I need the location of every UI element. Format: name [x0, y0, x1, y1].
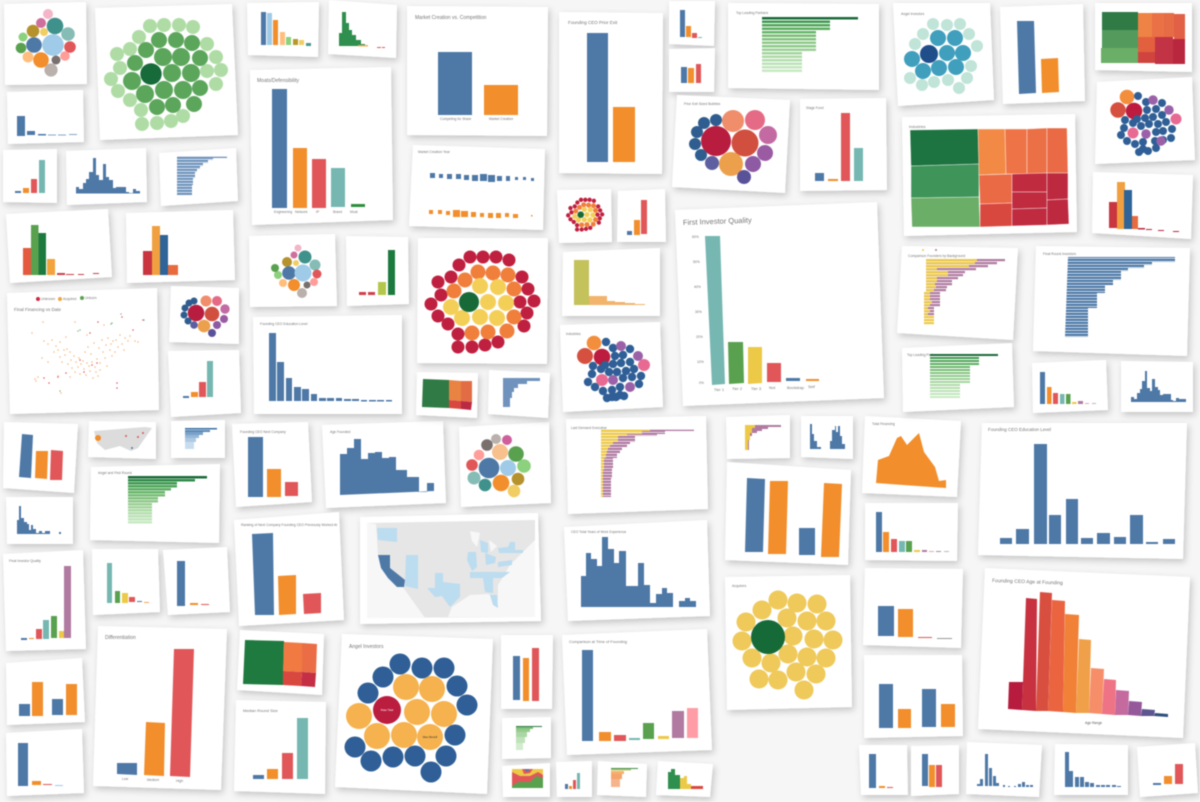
bubbles	[344, 654, 478, 782]
panel: next company ranking bars	[234, 512, 344, 626]
legend: Acquired	[63, 297, 76, 301]
legend	[36, 296, 97, 301]
title: CEO Total Years of Work Experience	[571, 530, 626, 534]
panel: First Investor Quality: Self	[808, 384, 816, 389]
axis labels: 60%	[692, 235, 699, 239]
panel: repeated color bubbles	[249, 234, 337, 307]
panel: Market Creation vs Competition	[407, 6, 548, 136]
panel: red orange blue bars	[126, 210, 235, 283]
panel: bottom mini gradient histogram	[656, 761, 713, 797]
bubbles	[689, 110, 777, 184]
panel: Moats and Defensibility: Brand	[333, 210, 342, 214]
title: Total Financing	[872, 422, 895, 426]
title: Acquirers	[732, 584, 747, 588]
title: Prior Exit Sized Bubbles	[684, 102, 721, 106]
panel: dominant blue bar	[163, 547, 230, 615]
bar chart	[253, 718, 308, 779]
title: Final Financing vs Date	[14, 307, 62, 312]
panel: multi color bars	[865, 503, 958, 561]
panel: Top Leading Partners	[728, 3, 879, 90]
horizontal bars	[762, 17, 858, 72]
panel: rising four bars	[3, 149, 57, 203]
panel: bottom mini bars	[556, 761, 592, 797]
axis labels: 40%	[694, 285, 701, 289]
title: Final Investor Quality	[9, 559, 41, 563]
panel: stacked horizontal yellow purple	[566, 416, 708, 514]
horizontal bars	[930, 354, 998, 398]
highlighted states	[377, 528, 523, 608]
panel: First Investor Quality: Bootstrap	[787, 385, 805, 390]
panel: three bars left	[3, 422, 78, 493]
panel: small three bars	[669, 48, 715, 92]
panel: Top Leading Partners second	[902, 343, 1014, 412]
panel: Founding CEO Age at Founding	[978, 568, 1190, 738]
panel: mini layered bubbles	[557, 189, 612, 243]
panel: green mini horizontal	[502, 717, 551, 759]
panel: median round size small	[168, 350, 241, 417]
panel: age histogram	[322, 421, 446, 508]
axis labels: 20%	[696, 335, 703, 339]
title: Founding CEO Next Company	[240, 430, 286, 434]
panel: blue staircase horizontal	[488, 370, 550, 418]
panel: three bars narrow	[501, 635, 553, 709]
panel: Founding CEO Age at Founding: Age Range	[1085, 721, 1102, 725]
bar chart	[1000, 444, 1175, 544]
title: Top Leading Partners	[736, 11, 769, 15]
stacked bars	[924, 259, 1005, 324]
title: First Investor Quality	[683, 216, 752, 227]
bar chart	[438, 52, 518, 115]
histogram	[340, 439, 434, 495]
panel: orange area chart	[862, 416, 961, 497]
panel: blue histogram right	[1121, 361, 1193, 412]
title: Market Creation vs. Competition	[415, 15, 487, 21]
panel: sorted color bars	[247, 2, 319, 57]
panel: small bars one dominant	[7, 90, 84, 144]
panel: bottom bars 4	[1054, 744, 1128, 795]
panel: three rising bars	[617, 189, 666, 242]
title: Last Demand Executive	[571, 426, 607, 430]
bar chart	[252, 533, 321, 615]
blue squares	[430, 173, 534, 182]
axis labels: 30%	[695, 310, 702, 314]
panel: US state map	[360, 513, 541, 624]
panel: Median Round Size	[234, 700, 326, 794]
panel: next company bars	[232, 422, 312, 507]
panel: grouped color bars top right	[1092, 172, 1193, 239]
title: Angel Investors	[349, 644, 384, 650]
panel: First Investor Quality: Tier 1	[714, 387, 725, 392]
title: Founding CEO Prior Exit	[568, 20, 618, 25]
area chart	[876, 433, 946, 488]
panel: Final Investor Quality small	[3, 550, 86, 651]
bar chart	[21, 566, 71, 640]
panel: Market Creation small	[1000, 4, 1085, 104]
horizontal bars	[1065, 257, 1175, 337]
bubbles	[732, 590, 842, 700]
histogram	[1008, 592, 1168, 717]
California	[378, 555, 405, 587]
panel: thirteen color bubbles	[459, 422, 551, 507]
title: Top Leading Partners	[907, 353, 940, 357]
title: Market Creation Year	[418, 150, 451, 154]
panel: First Investor Quality: Tier 2	[732, 386, 743, 391]
panel: olive long-tail histogram	[562, 248, 660, 316]
title: Age Founded	[330, 430, 350, 434]
panel: Founding CEO Education Level	[978, 423, 1187, 559]
panel: blue histogram	[66, 148, 147, 205]
panel: age histogram blue	[564, 520, 710, 621]
panel: Angel Investors teal bubbles	[893, 3, 994, 106]
left chart	[745, 478, 788, 554]
panel: Moats and Defensibility: Engineering	[274, 210, 292, 214]
horizontal bars	[128, 476, 207, 524]
bubbles: Peter Thiel	[381, 708, 394, 712]
panel: green histogram	[328, 0, 397, 58]
map base	[367, 520, 535, 618]
panel: Final Round Investors	[1033, 246, 1190, 356]
panel: Moats and Defensibility: Moat	[350, 210, 358, 214]
panel: treemap top right	[1095, 3, 1192, 72]
bar chart	[582, 650, 698, 741]
histogram	[581, 537, 696, 607]
panel: Prior Exit bubbles	[672, 95, 790, 193]
title: Industries	[566, 332, 581, 336]
panel: small four bars	[669, 1, 715, 46]
title: Differentiation	[105, 635, 136, 641]
axis labels	[692, 235, 704, 385]
panel: colored stacked area mini	[502, 763, 550, 797]
panel: paired mini histograms	[801, 416, 853, 459]
panel: square marks timeline	[409, 145, 545, 230]
bar chart	[815, 113, 863, 181]
panel: two bars with small tail	[863, 568, 963, 648]
panel: bottom histogram 3	[966, 742, 1042, 797]
bubbles	[904, 18, 983, 94]
panel: Moats and Defensibility: Network	[295, 210, 308, 214]
panel: Industries treemap	[902, 114, 1077, 236]
panel: prior exit bubbles small	[169, 286, 239, 344]
stacked bars	[600, 429, 695, 498]
title: Stage Fund	[806, 106, 824, 110]
panel: acquirers yellow bubbles	[725, 575, 852, 710]
panel: multicolor sorted bars	[1032, 360, 1108, 413]
panel: founding CEO education bars	[253, 315, 402, 414]
panel: green dominant bars	[346, 236, 409, 306]
axis labels: 50%	[693, 260, 700, 264]
panel: paired bars left	[6, 658, 85, 725]
treemap	[910, 128, 1069, 227]
panel: First Investor Quality: Not	[769, 385, 776, 390]
panel: small treemap bottom	[237, 630, 324, 695]
panel: bottom bars 2	[911, 745, 959, 796]
title: Angel and First Round	[98, 471, 132, 475]
bar chart	[269, 333, 392, 402]
title: Final Round Investors	[1043, 252, 1076, 256]
bar chart	[272, 89, 365, 208]
panel: paired two bar charts	[864, 655, 963, 738]
panel: small map with dots	[88, 421, 156, 459]
panel: First Investor Quality: Tier 3	[751, 386, 762, 391]
title: Founding CEO Education Level	[988, 427, 1051, 432]
panel: first investor quality small	[92, 549, 160, 615]
panel: red orange yellow bubbles	[417, 238, 548, 364]
bar chart	[248, 437, 298, 497]
panel: bottom bars 5	[1137, 743, 1198, 797]
title: Comparison Founders by Background	[908, 254, 965, 258]
bubbles: Marc Benioff	[423, 735, 438, 739]
axis labels: 10%	[697, 360, 704, 364]
right chart	[799, 483, 842, 557]
bar chart	[587, 33, 635, 162]
panel: Moats and Defensibility: IP	[316, 210, 320, 214]
scatter dots	[32, 314, 144, 393]
title: Median Round Size	[243, 708, 279, 713]
panel: Differentiation	[93, 626, 227, 790]
panel: bottom mini gradient horizontal	[597, 761, 647, 797]
panel: dominant bar bottom left	[6, 729, 84, 796]
panel: scatter final financing vs date	[7, 288, 159, 414]
panel: stacked yellow purple wide	[897, 246, 1018, 340]
panel: green bubble chart	[95, 4, 238, 140]
panel: Market Creation vs Competition: Competing for Share	[440, 117, 471, 121]
panel: red green orange bars	[6, 209, 112, 283]
panel: Differentiation: Low	[122, 777, 129, 781]
title: Moats/Defensibility	[257, 78, 299, 84]
panel: Angel and First Round	[90, 464, 220, 543]
panel: navy bubbles top right	[1095, 77, 1195, 164]
panel: First Investor Quality	[675, 202, 884, 406]
panel: right three-bar with orange	[800, 98, 887, 191]
legend	[922, 249, 937, 251]
panel: bottom bars 1	[859, 745, 908, 795]
axis labels: 0%	[699, 381, 704, 385]
panel: Comparison at Time of Founding	[562, 629, 712, 755]
panel: blue gradient horizontal bars	[171, 420, 225, 458]
panel: Differentiation: Medium	[147, 778, 159, 782]
title: Angel Investors	[901, 12, 925, 16]
panel: Angel Investors bubbles	[335, 634, 493, 794]
legend: Unicorn	[85, 296, 97, 300]
panel: Moats and Defensibility	[250, 67, 393, 225]
panel: sorted horizontal bars	[159, 148, 238, 206]
panel: CEO wealth double bars	[725, 462, 851, 565]
panel: small long-tail histogram	[6, 497, 73, 544]
legend: Unknown	[41, 297, 55, 301]
bar chart	[117, 649, 194, 777]
bar chart	[705, 236, 819, 385]
title: Ranking of Next Company Founding CEO Previously Worked At	[241, 523, 337, 527]
panel: Differentiation: High	[176, 779, 183, 783]
title: Founding CEO Age at Founding	[992, 578, 1063, 586]
panel: small treemap middle	[416, 372, 478, 418]
title: Founding CEO Education Level	[260, 322, 308, 326]
panel: small color bubbles top left	[4, 2, 87, 85]
title: Industries	[909, 125, 926, 129]
panel: Founding CEO Prior Exit	[559, 12, 663, 174]
title: Comparison at Time of Founding	[569, 639, 627, 644]
panel: navy bubbles middle	[560, 322, 663, 412]
orange squares	[429, 210, 532, 218]
panel: Market Creation vs Competition: Market Creation	[489, 117, 513, 121]
panel: mini stacked horizontal	[726, 415, 790, 459]
